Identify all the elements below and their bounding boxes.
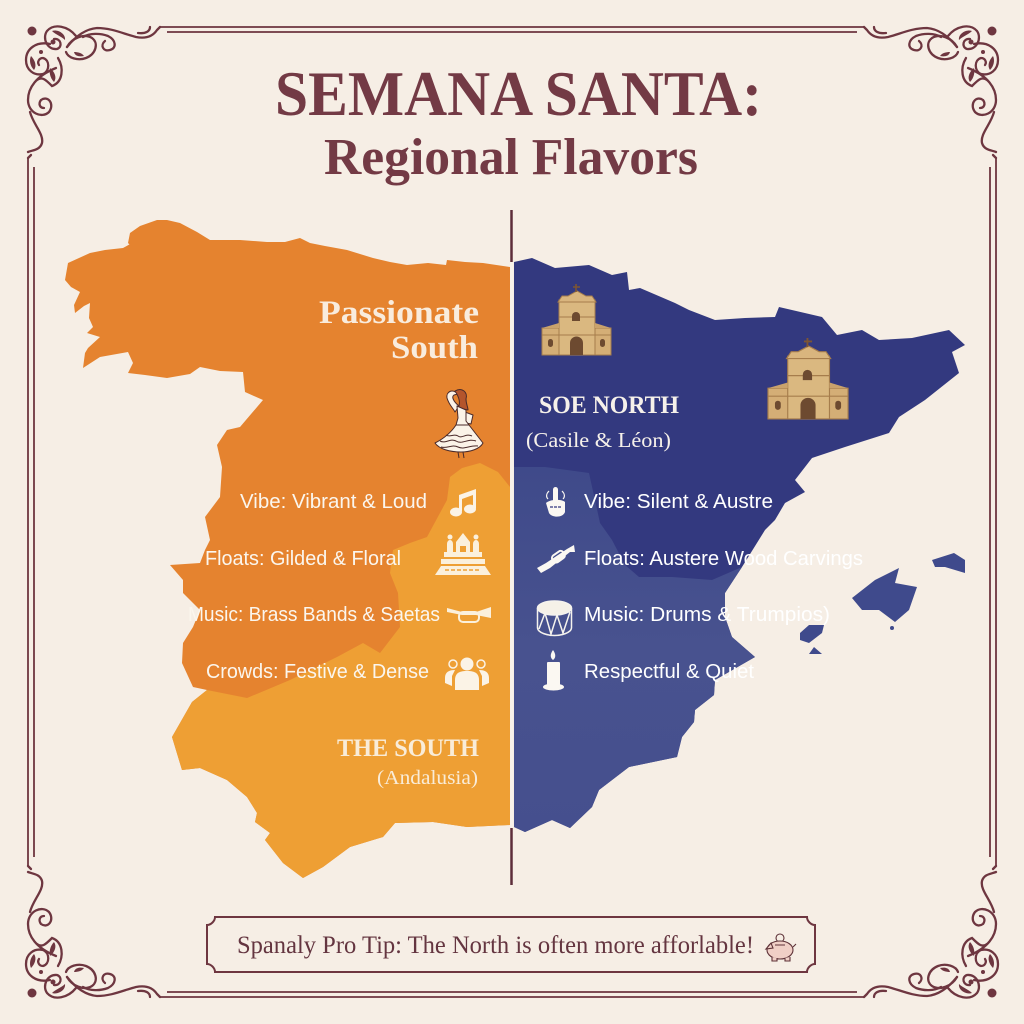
icon: flamenco dancer: [435, 390, 483, 458]
icon: crowd: [445, 658, 489, 690]
Balearic islands: [800, 553, 965, 654]
region: south-east lighter blue: [514, 467, 755, 832]
tip text: Spanaly Pro Tip: The North is often more afforlable!: [237, 932, 754, 959]
icon: drum: [538, 601, 572, 636]
white divider over the map: [510, 262, 513, 828]
label: The South: THE SOUTH: [337, 735, 480, 762]
south features list: Floats: Gilded & Floral: [205, 548, 401, 570]
north features list: Vibe: Silent & Austre: [584, 491, 773, 513]
icon: piggy bank: [766, 934, 796, 961]
title: Regional Flavors: [324, 129, 698, 186]
heading: Passionate South: Passionate: [319, 295, 479, 331]
south features list: Crowds: Festive & Dense: [206, 661, 429, 683]
south features list: Music: Brass Bands & Saetas: [188, 604, 440, 626]
icon: gilded float: [435, 533, 491, 575]
north features list: Music: Drums & Trumpios): [584, 604, 830, 626]
south features list: Vibe: Vibrant & Loud: [240, 491, 427, 513]
title: [275, 59, 762, 186]
region: Andalusia lighter orange: [172, 463, 510, 878]
icon: silent hand: [546, 487, 565, 517]
icon: church north-east: [768, 338, 848, 419]
icon: church north-west: [542, 284, 611, 355]
label: The South: [337, 735, 480, 789]
icon: trumpet north: [537, 545, 575, 573]
tip banner: [207, 917, 815, 972]
label: The South: (Andalusia): [377, 767, 478, 789]
icon: music note: [450, 489, 476, 516]
north features list: Floats: Austere Wood Carvings: [584, 548, 863, 570]
icon: candle: [543, 650, 564, 690]
icon: brass trumpet south: [447, 607, 491, 622]
label: North: SOE NORTH: [539, 392, 680, 419]
heading: Passionate South: [319, 295, 479, 366]
map: south half of Spain: [65, 220, 510, 878]
label: North: (Casile & Léon): [526, 428, 671, 452]
map: north half of Spain: [514, 258, 965, 832]
title: SEMANA SANTA:: [275, 59, 762, 129]
label: North: [526, 392, 680, 452]
heading: Passionate South: South: [391, 330, 478, 366]
north features list: Respectful & Quiet: [584, 661, 754, 683]
north features list: [584, 491, 863, 683]
south features list: [188, 491, 440, 683]
center divider line: [510, 210, 513, 885]
